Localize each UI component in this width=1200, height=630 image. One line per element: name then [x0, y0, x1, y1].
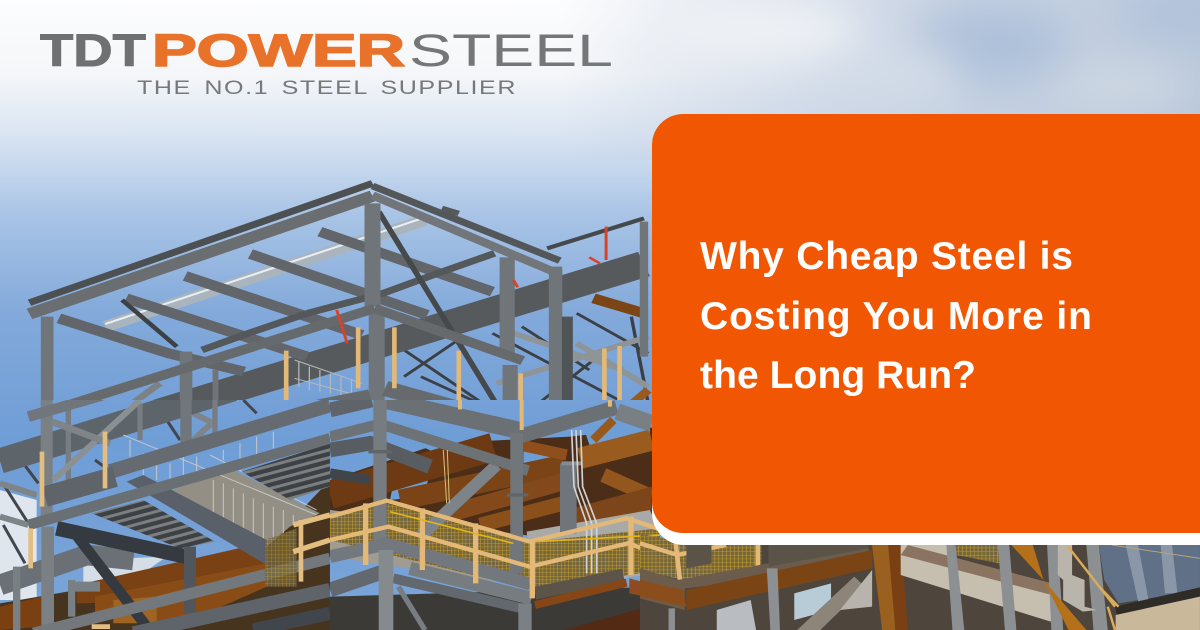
red clamps	[337, 227, 606, 343]
deck roofing strip	[105, 220, 425, 327]
diagonal rust brace	[1011, 545, 1086, 630]
lower left grey girder	[0, 555, 133, 585]
columns	[40, 400, 53, 516]
photo: upper steel frame	[26, 180, 652, 400]
panel: orange headline card	[652, 114, 1200, 533]
rust girders	[77, 545, 267, 603]
columns	[40, 203, 648, 400]
headline: Why Cheap Steel is	[700, 235, 1073, 278]
distant trusses	[403, 312, 650, 400]
stair railing upper	[295, 360, 362, 397]
mesh and rail	[640, 533, 761, 580]
top roof frame	[29, 183, 560, 415]
photo: lower right structure under the panel	[640, 533, 1200, 630]
platform decks	[330, 544, 530, 584]
stair railing and treads	[167, 470, 320, 547]
sky windows through the girders	[390, 420, 650, 500]
concrete-clad beam	[901, 545, 1058, 622]
grey backdrop behind railing	[526, 510, 654, 578]
mesh panels	[330, 503, 533, 590]
light joists behind	[496, 331, 650, 388]
columns	[373, 400, 387, 540]
logo word: STEEL: STEEL	[409, 25, 613, 76]
main I-beam	[0, 389, 233, 461]
diagonal brace	[420, 465, 497, 537]
steel columns	[946, 545, 1108, 630]
pier and conduit	[560, 463, 577, 534]
stair stringer	[127, 475, 267, 565]
headline	[700, 235, 1092, 397]
timber posts	[31, 432, 301, 582]
dark cross beam	[57, 528, 187, 557]
logo tagline: THE NO.1 STEEL SUPPLIER	[137, 78, 517, 99]
rust girders	[330, 447, 493, 495]
headline: the Long Run?	[700, 354, 976, 397]
encased pier	[1058, 545, 1097, 612]
pale cloud behind	[0, 490, 37, 600]
level beam	[330, 424, 528, 471]
ribbed deck	[92, 500, 215, 548]
grey posts and light panels	[717, 600, 756, 630]
hanging rope	[443, 450, 449, 503]
yellow top wires	[390, 512, 660, 543]
dark base under the girders	[0, 480, 330, 630]
photo: lower middle structure	[330, 400, 660, 630]
rust beams	[593, 298, 644, 313]
timber rails	[330, 400, 660, 598]
rust column	[871, 545, 908, 630]
dark mass below deck	[330, 587, 660, 630]
timber posts upper	[284, 327, 622, 400]
logo: TDT Power Steel	[40, 25, 613, 99]
bottom beams	[33, 558, 330, 630]
photo: lower left structure	[0, 389, 330, 630]
rust girders	[686, 550, 872, 610]
level beams	[28, 395, 103, 417]
panel shadow: white backing	[652, 140, 1200, 545]
main long I-beam	[153, 252, 650, 400]
mesh at stair corner	[265, 528, 297, 587]
upper level beams	[330, 400, 372, 410]
far trusses and beams	[3, 400, 257, 563]
logo word: POWER: POWER	[152, 25, 405, 76]
far wall and beige building	[1099, 545, 1200, 603]
framing levels	[68, 304, 526, 400]
headline: Costing You More in	[700, 295, 1092, 338]
logo word: TDT: TDT	[40, 25, 146, 76]
